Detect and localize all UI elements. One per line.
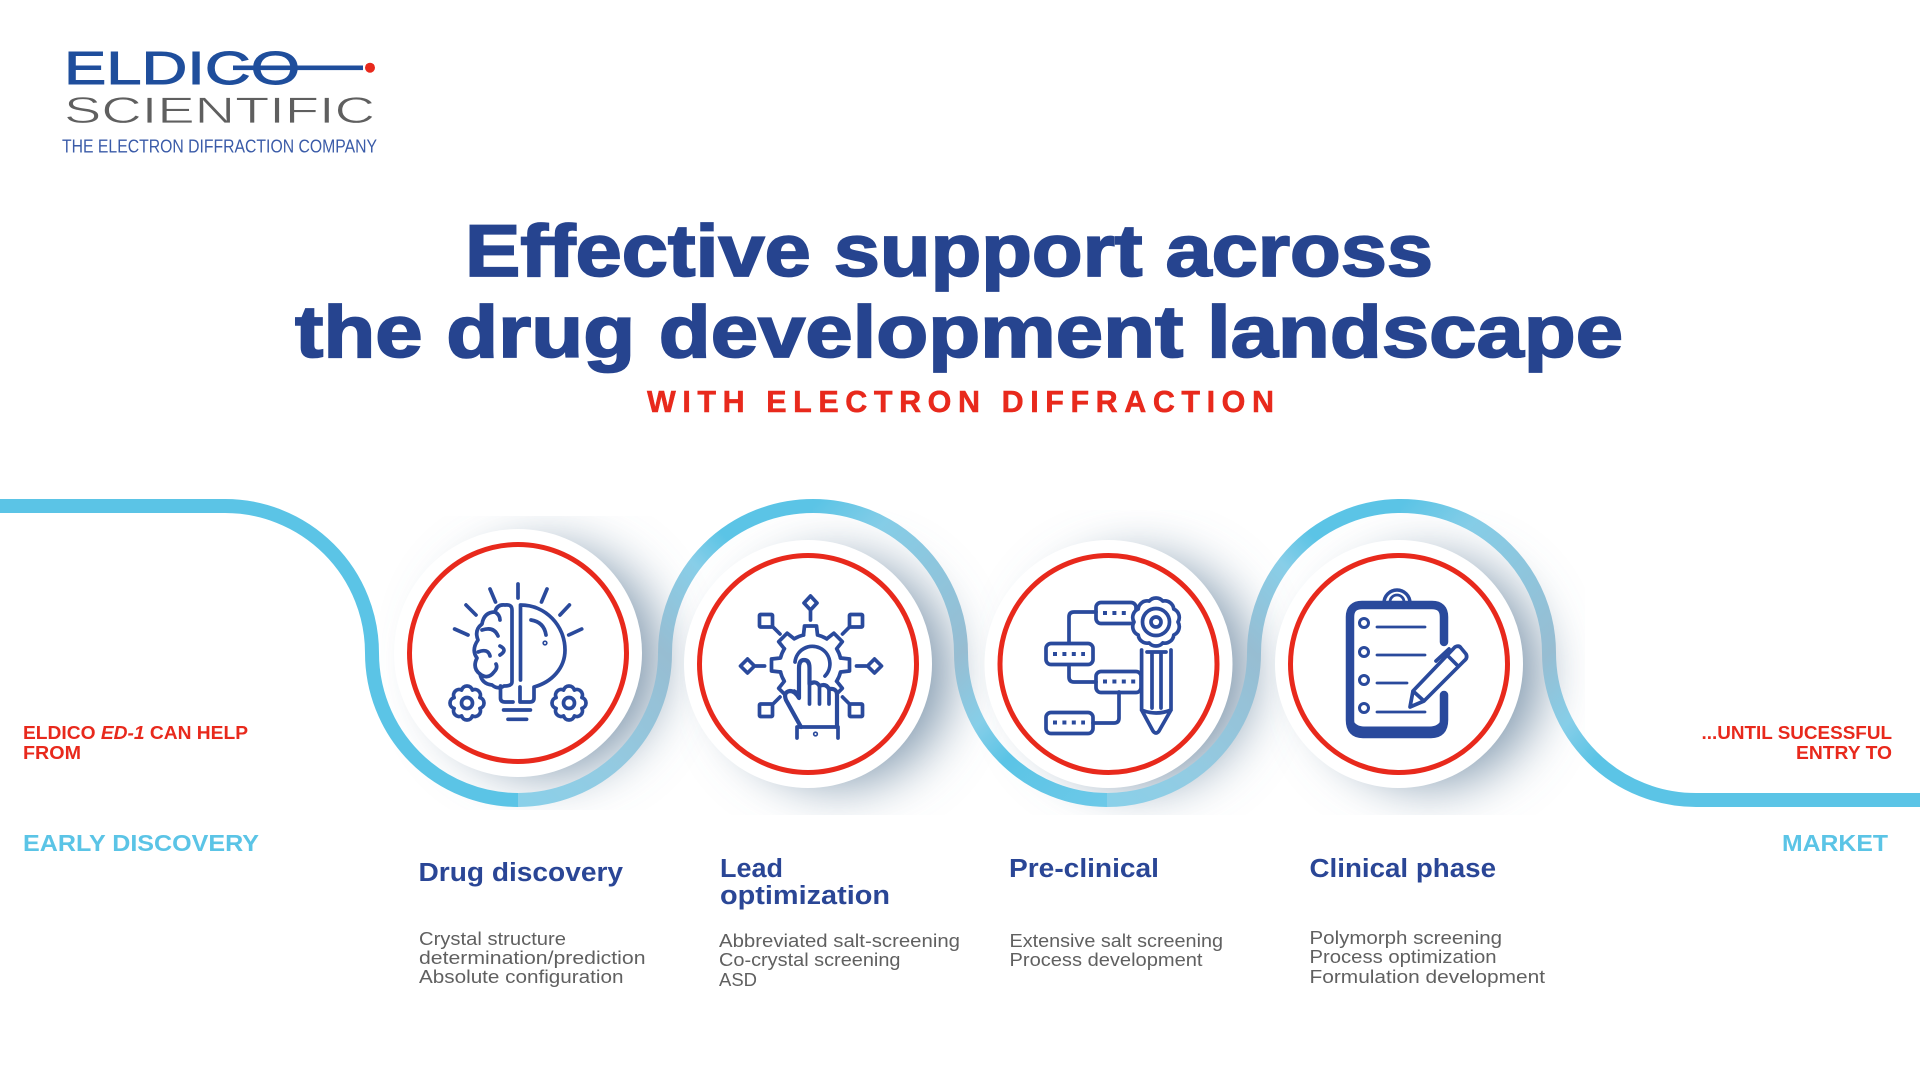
panel: clinical phase <box>1275 540 1545 987</box>
text: lead optimization uses: ASD <box>719 969 757 990</box>
title <box>295 211 1623 373</box>
circle: clinical phase <box>1275 540 1523 788</box>
text: lead optimization uses <box>719 930 960 990</box>
right label: entry: ENTRY TO <box>1796 742 1892 763</box>
panel: pre-clinical <box>984 540 1232 970</box>
text: clinical phase uses: Process optimization <box>1310 946 1496 967</box>
text: drug discovery uses: Crystal structure <box>419 928 566 949</box>
panel: drug discovery <box>394 529 646 987</box>
text: pre-clinical uses <box>1010 930 1223 970</box>
heading: lead optimization: optimization <box>720 882 890 910</box>
icon: brain light bulb <box>450 584 586 720</box>
text: drug discovery uses: Absolute configuration <box>419 966 624 987</box>
logo: ELDICO <box>64 42 300 94</box>
left label: start: ELDICO ED-1 CAN HELP <box>23 722 248 743</box>
icon: flowchart gear and pencil <box>1046 592 1186 734</box>
left label: from: FROM <box>23 742 81 763</box>
shadows behind circles <box>435 548 1542 785</box>
heading: pre-clinical: Pre-clinical <box>1009 855 1159 883</box>
circle: drug discovery <box>394 529 642 777</box>
early discovery label: EARLY DISCOVERY <box>23 830 259 856</box>
icon: clipboard and pen <box>1350 590 1467 734</box>
right label: until: ...UNTIL SUCESSFUL <box>1702 722 1892 743</box>
text: clinical phase uses <box>1310 927 1545 987</box>
circle: lead optimization <box>684 540 932 788</box>
logo <box>62 42 377 156</box>
heading: lead optimization: Lead <box>720 855 783 883</box>
text: clinical phase uses: Formulation development <box>1310 966 1545 987</box>
text: clinical phase uses: Polymorph screening <box>1310 927 1502 948</box>
text: lead optimization uses: Co-crystal screening <box>719 949 900 970</box>
text: pre-clinical uses: Extensive salt screening <box>1010 930 1223 951</box>
icon: gear with hand <box>740 596 882 738</box>
heading: drug discovery: Drug discovery <box>418 859 624 887</box>
title: Effective support across <box>465 211 1433 292</box>
logo: THE ELECTRON DIFFRACTION COMPANY <box>62 136 377 156</box>
title: the drug development landscape <box>295 292 1623 373</box>
market label: MARKET <box>1782 830 1889 856</box>
text: drug discovery uses: determination/prediction <box>419 947 646 968</box>
wave line <box>0 506 1920 800</box>
logo: SCIENTIFIC <box>64 89 375 131</box>
circle: pre-clinical <box>984 540 1232 788</box>
heading: clinical phase: Clinical phase <box>1310 855 1496 883</box>
text: drug discovery uses <box>419 928 646 987</box>
heading: lead optimization <box>720 855 890 910</box>
text: pre-clinical uses: Process development <box>1010 949 1202 970</box>
panel: lead optimization <box>684 540 960 990</box>
text: lead optimization uses: Abbreviated salt-screening <box>719 930 960 951</box>
subtitle: WITH ELECTRON DIFFRACTION <box>647 385 1274 419</box>
